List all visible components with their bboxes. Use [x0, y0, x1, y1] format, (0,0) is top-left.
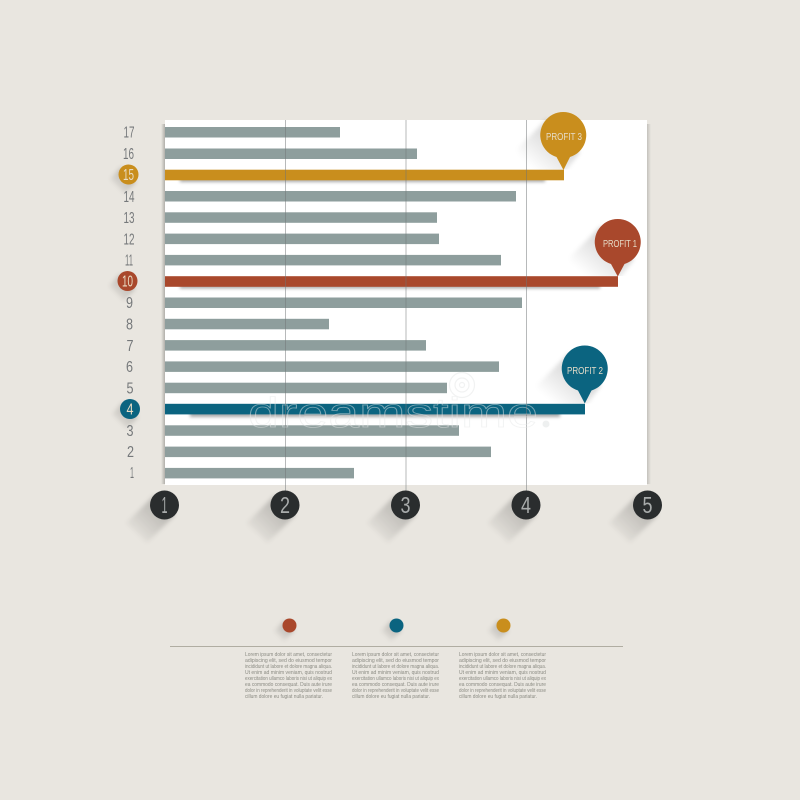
- text block 3: Ut enim ad minim veniam, quis nostrud: [459, 670, 546, 676]
- y axis labels: 12: [124, 232, 135, 248]
- grey bars: [165, 127, 522, 478]
- y axis labels: 2: [127, 444, 134, 461]
- text block 1: Lorem ipsum dolor sit amet, consectetur: [245, 652, 332, 658]
- text block 3: ea commodo consequat. Duis aute irure: [459, 682, 546, 688]
- marker: 10: [109, 271, 138, 301]
- y axis labels: 5: [126, 380, 134, 398]
- text block 1: [245, 652, 332, 700]
- text block 1: ea commodo consequat. Duis aute irure: [245, 682, 332, 688]
- axis marker 3: [367, 490, 420, 543]
- legend dot: red: [274, 618, 296, 641]
- watermark: dreamstime: [248, 389, 538, 436]
- y axis labels: 17: [124, 124, 135, 142]
- text block 2: exercitation ullamco laboris nisi ut aliquip ex: [352, 676, 439, 682]
- text block 3: cillum dolore eu fugiat nulla pariatur.: [459, 694, 537, 700]
- marker: 10: 10: [122, 274, 133, 290]
- y axis labels: 16: [123, 146, 134, 163]
- legend: [274, 618, 510, 641]
- text block 1: exercitation ullamco laboris nisi ut aliquip ex: [245, 676, 332, 682]
- axis marker 2: [246, 490, 300, 543]
- callout: profit 1: [576, 219, 641, 276]
- text block 3: [459, 652, 546, 700]
- bar 15: [165, 170, 564, 180]
- axis marker 3: 3: [400, 492, 410, 518]
- text block 3: exercitation ullamco laboris nisi ut aliquip ex: [459, 676, 546, 682]
- text block 1: adipiscing elit, sed do eiusmod tempor: [245, 658, 332, 664]
- marker: 15: [110, 164, 138, 194]
- text block 2: dolor in reprehenderit in voluptate velit esse: [352, 688, 439, 694]
- text block 2: incididunt ut labore et dolore magna aliqua.: [352, 664, 439, 670]
- y axis labels: 8: [126, 316, 133, 334]
- text block 2: [352, 652, 439, 700]
- legend dot: teal: [381, 618, 404, 641]
- text block 1: cillum dolore eu fugiat nulla pariatur.: [245, 694, 323, 700]
- y axis labels: 1: [130, 465, 134, 482]
- text block 3: Lorem ipsum dolor sit amet, consectetur: [459, 652, 546, 658]
- axis marker 2: 2: [280, 492, 290, 518]
- callout: profit 2: PROFIT 2: [567, 366, 603, 377]
- axis marker 1: 1: [162, 492, 168, 518]
- marker: 15: 15: [123, 167, 134, 184]
- text block 3: adipiscing elit, sed do eiusmod tempor: [459, 658, 546, 664]
- marker: 4: 4: [126, 402, 134, 418]
- bar shadows for highlighted bars: [180, 178, 600, 417]
- y axis labels: 9: [126, 295, 133, 312]
- text block 3: incididunt ut labore et dolore magna aliqua.: [459, 664, 546, 670]
- x axis markers: [126, 490, 662, 543]
- bar chart: [165, 127, 618, 478]
- panel: chart: [161, 120, 651, 485]
- text block 2: cillum dolore eu fugiat nulla pariatur.: [352, 694, 430, 700]
- axis marker 4: [488, 490, 540, 543]
- y axis labels: 6: [126, 359, 133, 376]
- text block 1: incididunt ut labore et dolore magna aliqua.: [245, 664, 332, 670]
- callout: profit 2: [544, 346, 608, 404]
- text block 2: Ut enim ad minim veniam, quis nostrud: [352, 670, 439, 676]
- axis marker 4: 4: [521, 492, 531, 518]
- axis marker 5: [609, 490, 662, 543]
- grid lines: [286, 120, 526, 492]
- callout: profit 3: PROFIT 3: [546, 132, 582, 143]
- bar 10: [165, 276, 618, 287]
- text block 2: Lorem ipsum dolor sit amet, consectetur: [352, 652, 439, 658]
- legend dot: gold: [488, 618, 510, 641]
- marker: 4: [112, 399, 140, 429]
- axis marker 5: 5: [642, 492, 652, 518]
- axis marker 1: [126, 490, 179, 543]
- text block 1: dolor in reprehenderit in voluptate velit esse: [245, 688, 332, 694]
- y axis labels: 13: [124, 210, 135, 227]
- text block 3: dolor in reprehenderit in voluptate velit esse: [459, 688, 546, 694]
- watermark: [248, 372, 550, 436]
- y axis labels: [123, 124, 135, 482]
- text block 2: adipiscing elit, sed do eiusmod tempor: [352, 658, 439, 664]
- y axis labels: 14: [124, 189, 135, 206]
- bar 4: [165, 404, 585, 414]
- callout: profit 3: [518, 112, 586, 172]
- y axis labels: 7: [126, 338, 134, 355]
- y axis labels: 3: [126, 423, 134, 440]
- y axis labels: 11: [125, 252, 133, 270]
- text block 2: ea commodo consequat. Duis aute irure: [352, 682, 439, 688]
- callout: profit 1: PROFIT 1: [603, 239, 637, 250]
- text block 1: Ut enim ad minim veniam, quis nostrud: [245, 670, 332, 676]
